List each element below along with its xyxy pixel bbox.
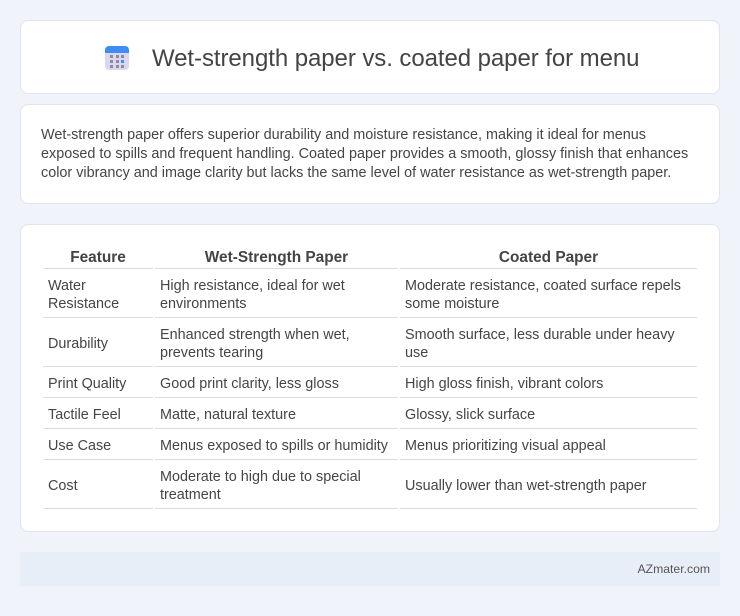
row: cost: treatment bbox=[160, 487, 221, 503]
row: use case: Menus prioritizing visual appeal bbox=[405, 438, 606, 454]
row: cost bbox=[48, 469, 647, 503]
row: water resistance: Resistance bbox=[48, 296, 119, 312]
intro panel bbox=[20, 104, 720, 204]
intro text: exposed to spills and frequent handling. Coated paper provides a smooth, glossy finish that enhances bbox=[41, 146, 688, 162]
icon: calendar bbox=[105, 46, 129, 70]
row: water resistance: Moderate resistance, coated surface repels bbox=[405, 278, 681, 294]
table header: wet-strength paper: Wet-Strength Paper bbox=[205, 249, 348, 266]
row: water resistance bbox=[48, 278, 681, 312]
row: durability: use bbox=[405, 345, 428, 361]
row: print quality bbox=[48, 376, 603, 392]
row: cost: Usually lower than wet-strength paper bbox=[405, 478, 647, 494]
intro text bbox=[41, 127, 688, 181]
row: water resistance: some moisture bbox=[405, 296, 499, 312]
row: tactile feel: Glossy, slick surface bbox=[405, 407, 535, 423]
footer bar bbox=[20, 552, 720, 586]
row: use case: Menus exposed to spills or humidity bbox=[160, 438, 388, 454]
row: cost: Moderate to high due to special bbox=[160, 469, 361, 485]
row: cost: Cost bbox=[48, 478, 78, 494]
row: durability: Durability bbox=[48, 336, 108, 352]
intro text: color vibrancy and image clarity but lacks the same level of water resistance as wet-strength paper. bbox=[41, 165, 671, 181]
row: durability: Enhanced strength when wet, bbox=[160, 327, 350, 343]
row: tactile feel bbox=[48, 407, 535, 423]
row: print quality: Good print clarity, less gloss bbox=[160, 376, 339, 392]
row: tactile feel: Matte, natural texture bbox=[160, 407, 296, 423]
row: tactile feel: Tactile Feel bbox=[48, 407, 121, 423]
row: use case: Use Case bbox=[48, 438, 111, 454]
title: Wet-strength paper vs. coated paper for menu bbox=[152, 45, 639, 72]
table header: coated paper: Coated Paper bbox=[499, 249, 598, 266]
row: durability bbox=[48, 327, 675, 361]
comparison table panel bbox=[20, 224, 720, 532]
intro text: Wet-strength paper offers superior durability and moisture resistance, making it ideal for menus bbox=[41, 127, 646, 143]
table header: feature: Feature bbox=[70, 249, 126, 266]
row: water resistance: environments bbox=[160, 296, 246, 312]
row: water resistance: High resistance, ideal for wet bbox=[160, 278, 345, 294]
row: durability: prevents tearing bbox=[160, 345, 263, 361]
row: print quality: Print Quality bbox=[48, 376, 126, 392]
row: print quality: High gloss finish, vibrant colors bbox=[405, 376, 603, 392]
title panel bbox=[20, 20, 720, 94]
footer credit: AZmater.com bbox=[638, 562, 710, 576]
row: water resistance: Water bbox=[48, 278, 86, 294]
row: durability: Smooth surface, less durable under heavy bbox=[405, 327, 675, 343]
row: use case bbox=[48, 438, 606, 454]
